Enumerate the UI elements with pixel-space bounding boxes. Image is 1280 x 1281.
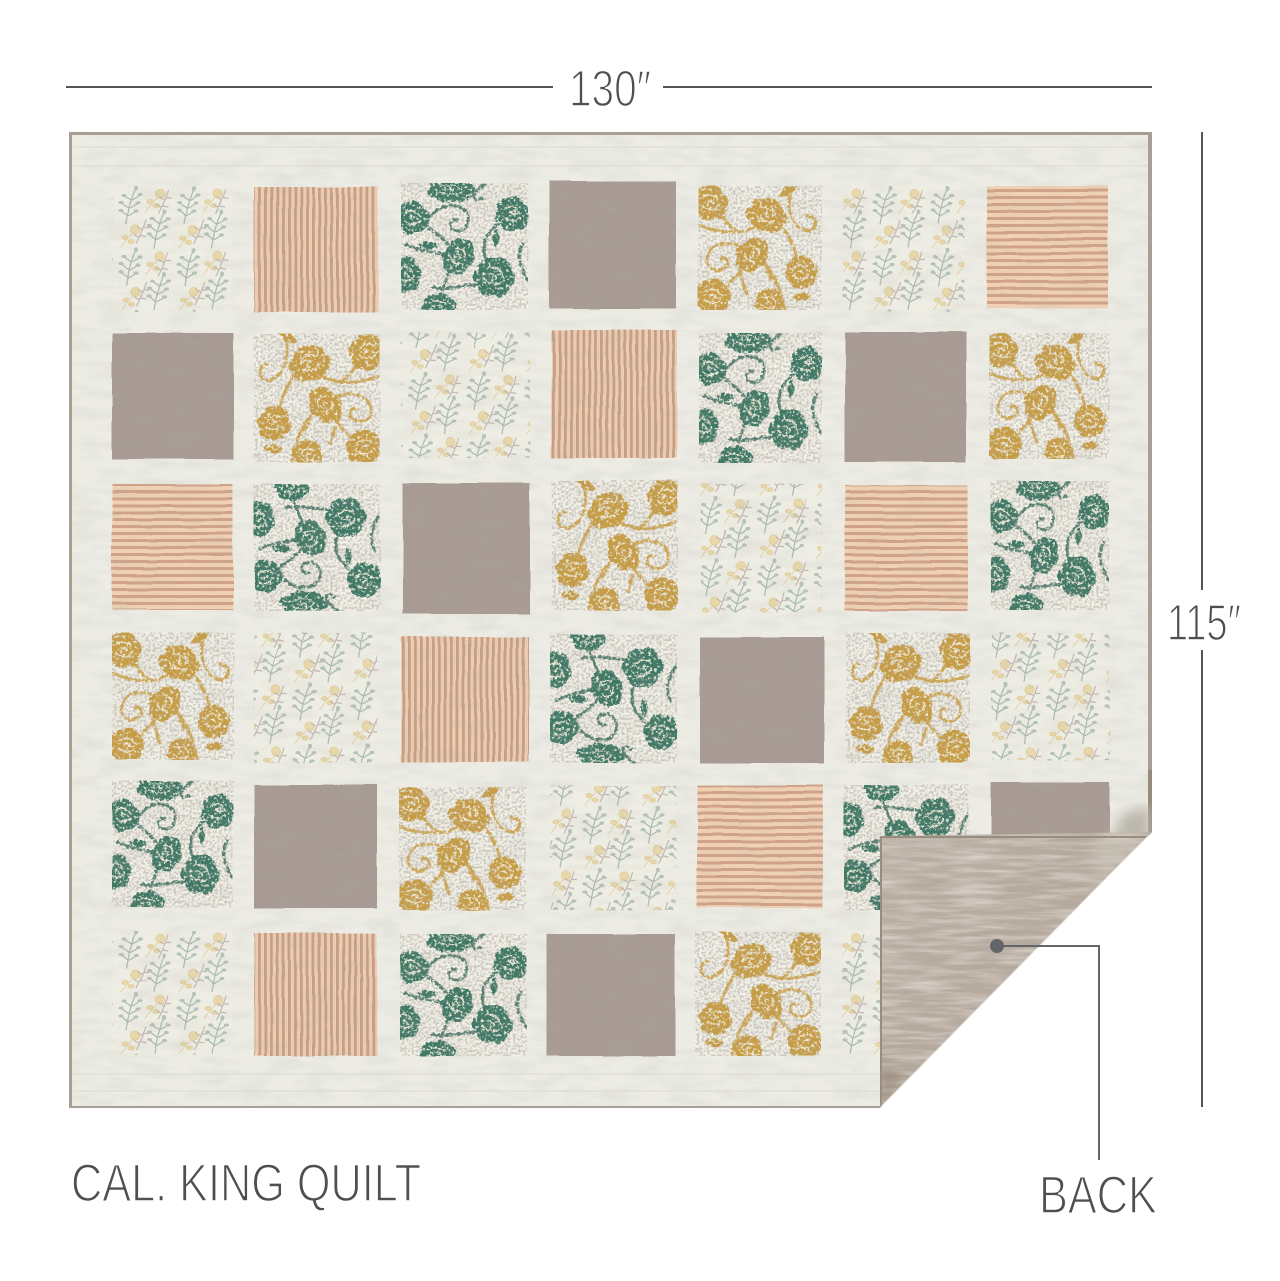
callout: back <box>990 939 1157 1225</box>
product title: CAL. KING QUILT <box>71 1154 421 1213</box>
row 1 patches <box>112 177 1108 321</box>
row 6 patches <box>112 931 880 1056</box>
grey wash by fold corner <box>1108 806 1150 842</box>
row 5 patches <box>103 774 1110 918</box>
row 3 patches <box>112 473 1111 621</box>
row 4 patches <box>112 632 1110 764</box>
right dimension: 115 inches: 115″ <box>1167 594 1241 651</box>
patch grid <box>103 177 1111 1066</box>
stitch lines <box>73 147 1148 1091</box>
top dimension: 130 inches: 130″ <box>569 60 651 117</box>
fabric wrinkle texture <box>69 132 1152 1108</box>
callout: back: BACK <box>1039 1166 1157 1225</box>
quilt back fold <box>880 832 1152 1108</box>
row 2 patches <box>112 327 1109 474</box>
quilt front <box>69 132 1152 1108</box>
